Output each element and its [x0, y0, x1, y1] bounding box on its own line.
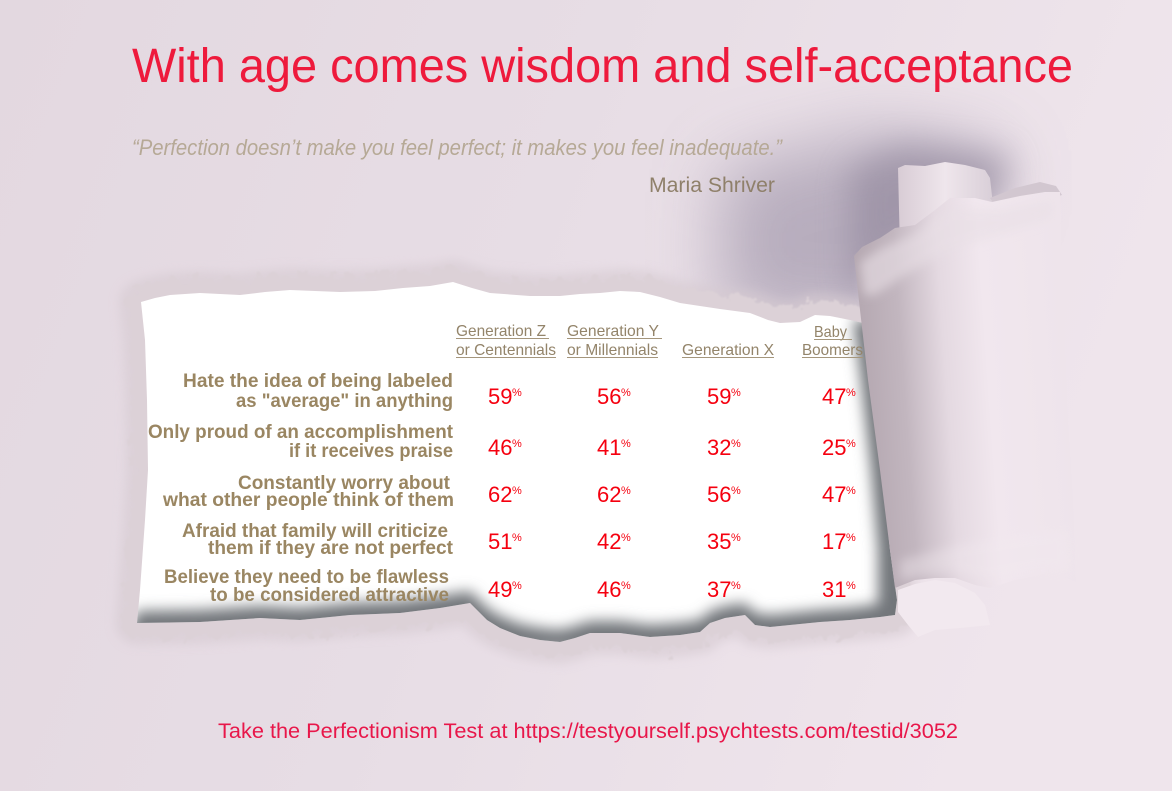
- row labels: if it receives praise: [289, 441, 453, 462]
- table column headers: Generation Z: [456, 323, 546, 340]
- row 1 values: 59: [488, 384, 512, 409]
- row 1 values: %: [846, 387, 856, 399]
- table column headers: Generation X: [682, 342, 774, 359]
- row 4 values: %: [512, 532, 522, 544]
- roll torn top highlight: [860, 200, 1052, 295]
- row 4 values: 17: [822, 529, 846, 554]
- row 1 values: %: [731, 387, 741, 399]
- torn paper edge around the hole: [137, 282, 897, 642]
- row labels: Constantly worry about: [238, 473, 451, 494]
- row 3 values: %: [621, 485, 631, 497]
- row 4 values: %: [731, 532, 741, 544]
- row 2 values: [488, 435, 856, 460]
- row 5 values: 49: [488, 577, 512, 602]
- row 2 values: 32: [707, 435, 731, 460]
- row 5 values: 31: [822, 577, 846, 602]
- row labels: what other people think of them: [162, 490, 454, 511]
- row 2 values: %: [731, 438, 741, 450]
- row 4 values: 35: [707, 529, 731, 554]
- row 3 values: [488, 482, 856, 507]
- row 3 values: 56: [707, 482, 731, 507]
- row 2 values: 25: [822, 435, 846, 460]
- torn hole: white table area: [137, 282, 897, 642]
- roll cast shadow: [720, 130, 1010, 330]
- table column headers: [456, 323, 863, 359]
- paper roll: [854, 192, 1076, 588]
- row 5 values: %: [731, 580, 741, 592]
- row 1 values: 59: [707, 384, 731, 409]
- row 1 values: %: [621, 387, 631, 399]
- row 1 values: 47: [822, 384, 846, 409]
- table column headers: or Centennials: [456, 342, 556, 359]
- table column headers: or Millennials: [567, 342, 658, 359]
- title: With age comes wisdom and self-acceptance: [132, 40, 1073, 93]
- inner shadow: bottom and right: [130, 320, 925, 650]
- row 3 values: %: [512, 485, 522, 497]
- row 5 values: %: [621, 580, 631, 592]
- row 2 values: %: [621, 438, 631, 450]
- row 1 values: %: [512, 387, 522, 399]
- row 2 values: 46: [488, 435, 512, 460]
- row 3 values: 62: [597, 482, 621, 507]
- row labels: Hate the idea of being labeled: [183, 371, 453, 392]
- row 5 values: %: [846, 580, 856, 592]
- torn flap behind the roll: [898, 162, 993, 250]
- quote author: Maria Shriver: [649, 174, 775, 197]
- torn blob at roll bottom: [898, 580, 990, 637]
- row 3 values: %: [846, 485, 856, 497]
- row 3 values: 47: [822, 482, 846, 507]
- row labels: as "average" in anything: [236, 391, 453, 412]
- row labels: Afraid that family will criticize: [182, 521, 448, 542]
- roll torn bottom highlight: [900, 530, 1070, 580]
- quote: “Perfection doesn’t make you feel perfect; it makes you feel inadequate.”: [132, 135, 784, 160]
- table column headers: Baby: [814, 324, 847, 341]
- footer link: Take the Perfectionism Test at https://testyourself.psychtests.com/testid/3052: [218, 720, 958, 743]
- row 1 values: [488, 384, 856, 409]
- row 5 values: %: [512, 580, 522, 592]
- row labels: Only proud of an accomplishment: [148, 422, 454, 443]
- row 2 values: 41: [597, 435, 621, 460]
- row labels: Believe they need to be flawless: [164, 567, 449, 588]
- row 2 values: %: [846, 438, 856, 450]
- row 4 values: 51: [488, 529, 512, 554]
- row labels: to be considered attractive: [210, 585, 449, 606]
- table column headers: Boomers: [802, 342, 863, 359]
- row 4 values: [488, 529, 856, 554]
- row 4 values: %: [846, 532, 856, 544]
- row 5 values: 46: [597, 577, 621, 602]
- row labels: [148, 371, 454, 606]
- row 3 values: 62: [488, 482, 512, 507]
- row 5 values: 37: [707, 577, 731, 602]
- thin flap at roll top right: [990, 182, 1062, 205]
- row 3 values: %: [731, 485, 741, 497]
- percentages table: [488, 384, 856, 602]
- row 4 values: %: [621, 532, 631, 544]
- row labels: them if they are not perfect: [208, 538, 454, 559]
- row 2 values: %: [512, 438, 522, 450]
- table column headers: Generation Y: [567, 323, 659, 340]
- row 1 values: 56: [597, 384, 621, 409]
- row 5 values: [488, 577, 856, 602]
- row 4 values: 42: [597, 529, 621, 554]
